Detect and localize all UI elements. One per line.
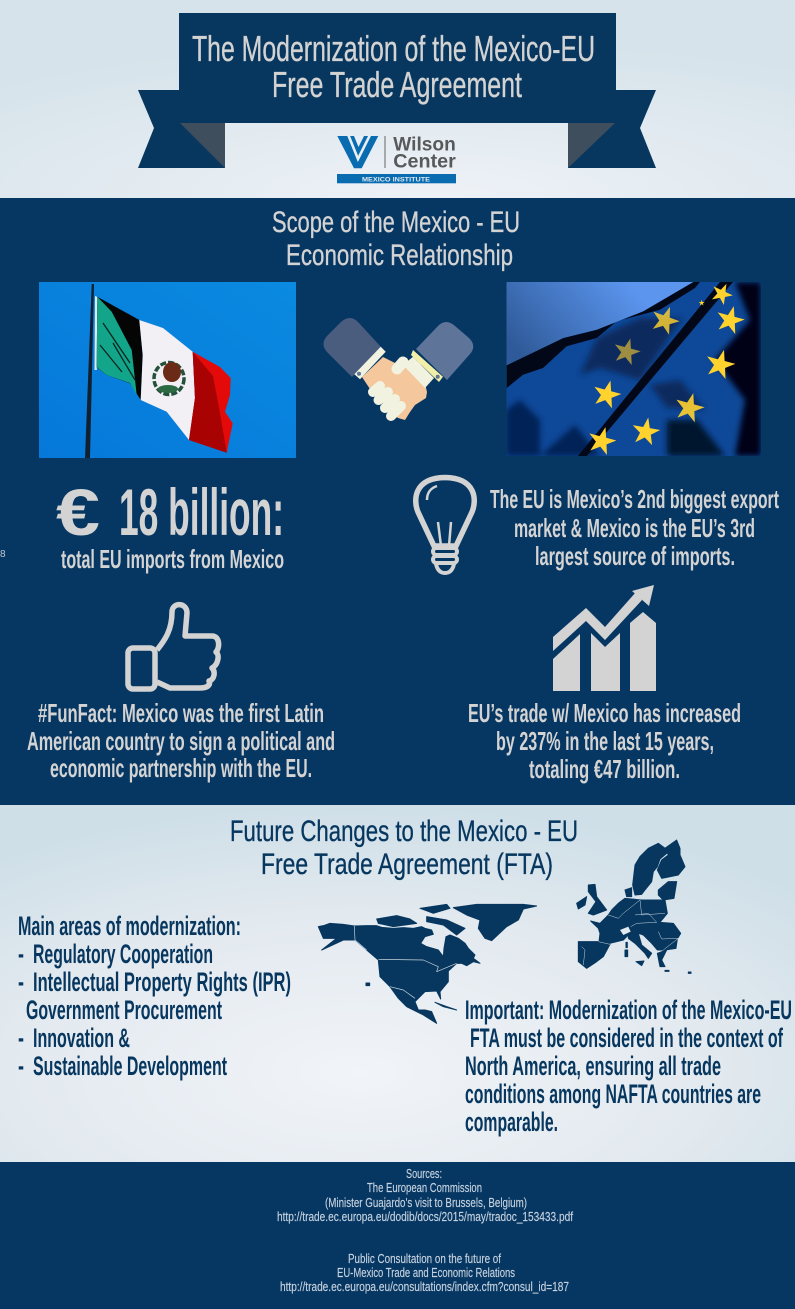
text: main areas of modernization: Regulatory Cooperation <box>33 939 213 969</box>
heading: scope: Scope of the Mexico - EU <box>272 206 520 239</box>
map: North America <box>318 904 537 1023</box>
text: sources: http://trade.ec.europa.eu/dodib/docs/2015/may/tradoc_153433.pdf <box>277 1209 573 1224</box>
logo: Wilson Center: MEXICO INSTITUTE <box>362 176 431 183</box>
text: main areas of modernization: Main areas of modernization: <box>18 911 241 941</box>
text: fun fact: #FunFact: Mexico was the first Latin <box>38 698 324 728</box>
ribbon banner <box>138 13 656 168</box>
panel: scope of the relationship <box>0 198 795 805</box>
text: sources: Public Consultation on the future of <box>348 1251 501 1266</box>
text: sources <box>277 1166 573 1294</box>
logo: Wilson Center <box>337 134 456 183</box>
text: main areas of modernization: - <box>18 1051 24 1081</box>
logo: Wilson Center: Center <box>393 152 456 172</box>
photo: EU flag <box>506 279 761 456</box>
panel: header <box>0 0 795 198</box>
text: main areas of modernization: Innovation & <box>33 1023 130 1053</box>
stat: 18 billion: € <box>56 475 100 549</box>
heading: scope: Economic Relationship <box>286 239 513 272</box>
text: sources: Sources: <box>406 1166 442 1181</box>
icon: handshake <box>324 318 473 420</box>
title: Free Trade Agreement <box>272 64 522 105</box>
text: sources: The European Commission <box>367 1180 482 1195</box>
text: main areas of modernization: Government Procurement <box>26 995 222 1025</box>
text: sources: EU-Mexico Trade and Economic Relations <box>337 1265 515 1280</box>
text: fun fact: American country to sign a political and <box>27 726 335 756</box>
title: The Modernization of the Mexico-EU <box>192 28 595 69</box>
text: main areas of modernization: - <box>18 1023 24 1053</box>
text: main areas of modernization <box>18 911 291 1081</box>
text: important note: comparable. <box>465 1107 558 1137</box>
text: sources: http://trade.ec.europa.eu/consultations/index.cfm?consul_id=187 <box>280 1279 569 1294</box>
panel: future changes <box>0 805 795 1162</box>
text: trade increase: totaling €47 billion. <box>529 754 680 784</box>
text: fun fact <box>27 698 335 783</box>
text: main areas of modernization: Intellectual Property Rights (IPR) <box>33 967 291 997</box>
text: export market <box>490 484 779 571</box>
stray mark: 8 <box>0 549 6 560</box>
text: fun fact: economic partnership with the EU. <box>50 753 312 783</box>
icon: thumbs up <box>128 605 219 689</box>
heading: scope <box>272 206 520 272</box>
text: main areas of modernization: - <box>18 939 24 969</box>
heading: future changes <box>230 815 578 881</box>
stat: 18 billion <box>56 475 284 574</box>
icon: light bulb <box>416 478 474 573</box>
heading: future changes: Free Trade Agreement (FTA) <box>261 848 553 881</box>
text: main areas of modernization: - <box>18 967 24 997</box>
stat: 18 billion: total EU imports from Mexico <box>61 544 284 574</box>
logo: Wilson Center: Wilson <box>393 134 456 156</box>
text: trade increase <box>468 698 741 784</box>
icon: rising bar chart <box>553 585 656 691</box>
photo: Mexican flag <box>39 282 296 458</box>
text: main areas of modernization: Sustainable Development <box>33 1051 227 1081</box>
map: Europe <box>577 840 691 973</box>
text: sources: (Minister Guajardo's visit to Brussels, Belgium) <box>325 1195 527 1210</box>
title <box>192 28 595 105</box>
text: important note <box>465 995 792 1137</box>
panel: sources footer <box>0 1162 795 1309</box>
heading: future changes: Future Changes to the Mexico - EU <box>230 815 578 848</box>
stat: 18 billion: 18 billion: <box>119 475 284 549</box>
